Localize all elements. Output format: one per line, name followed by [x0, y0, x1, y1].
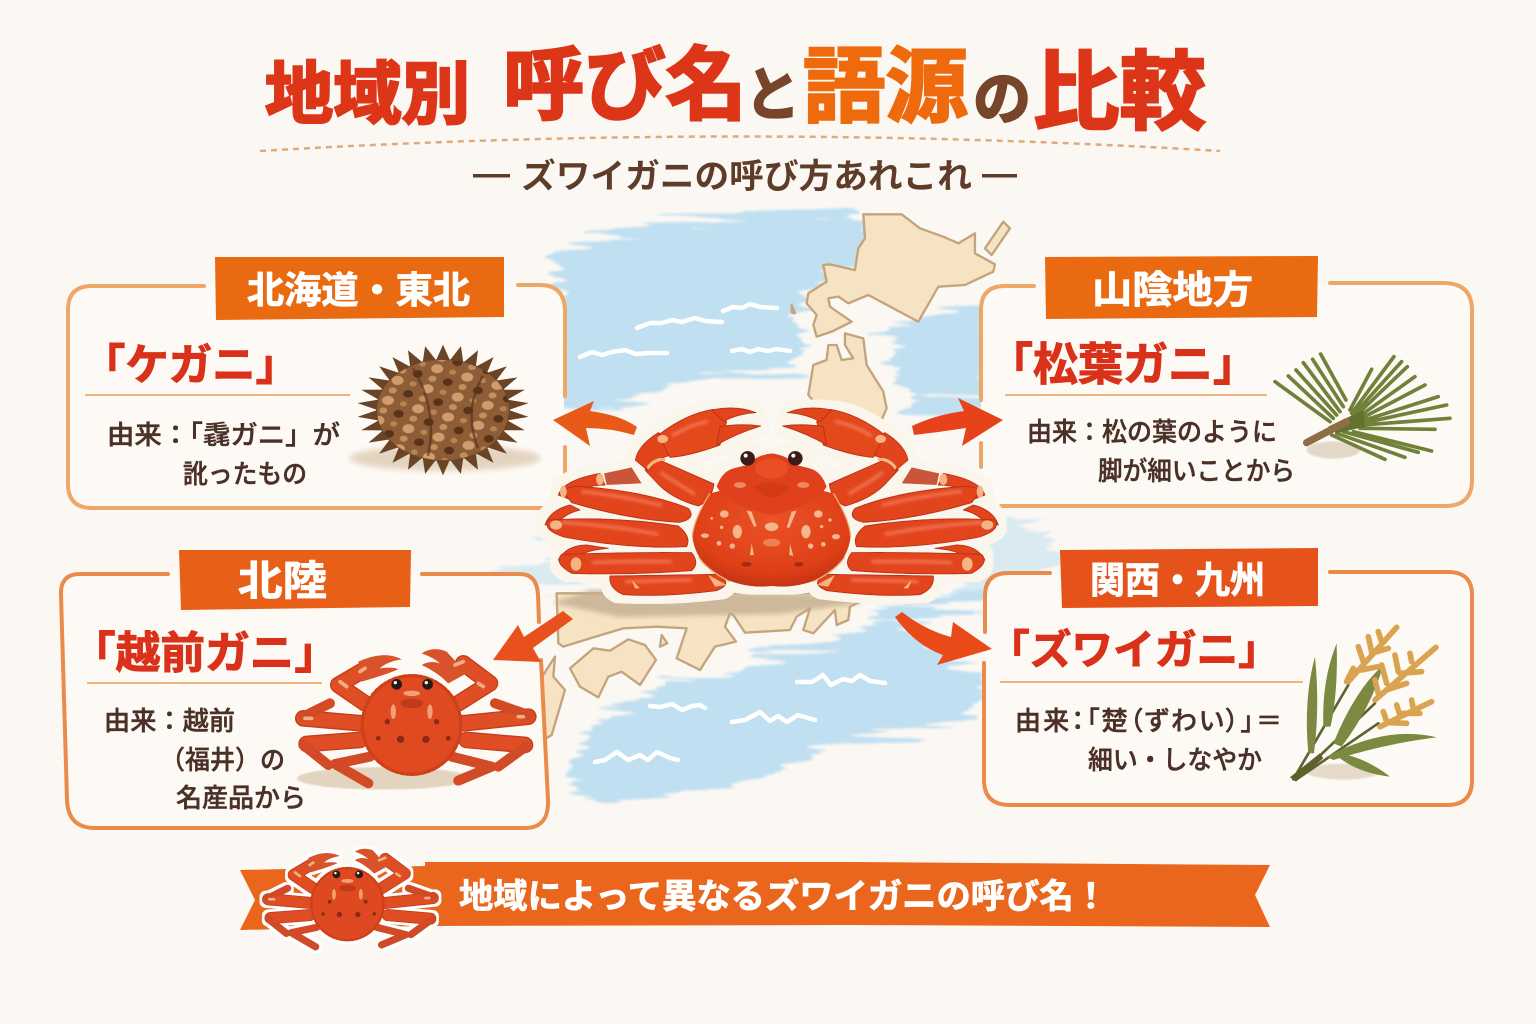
icon: pine needles — [1275, 354, 1450, 459]
banner text: 地域によって異なるズワイガニの呼び名！ — [459, 877, 1108, 916]
origin text — [1015, 706, 1282, 775]
title: 呼び名 — [503, 41, 747, 130]
title — [265, 41, 1206, 141]
map: Japan land — [540, 214, 1010, 740]
ribbon — [240, 862, 1270, 930]
name: 「越前ガニ」 — [71, 629, 339, 678]
origin text — [1027, 417, 1295, 486]
panel: 北海道・東北 — [67, 257, 565, 508]
arrow: to 関西・九州 — [895, 612, 992, 665]
name: 「ズワイガニ」 — [988, 627, 1280, 673]
map: crab shadow — [552, 590, 862, 617]
region header: 山陰地方 — [1092, 270, 1253, 312]
Hokkaido and northern Honshu — [792, 214, 1010, 432]
title: 比較 — [1033, 45, 1206, 141]
arrow: to 北陸 — [493, 611, 573, 662]
icon: rice plant — [1290, 627, 1437, 782]
origin text: 由来：松の葉のように — [1027, 417, 1277, 447]
name: 「松葉ガニ」 — [988, 339, 1258, 390]
panel: 山陰地方 — [981, 256, 1472, 506]
origin text: 由来：越前 — [104, 706, 235, 736]
crab: eyes — [740, 451, 803, 466]
title: 語源 — [803, 42, 968, 133]
region header — [1045, 256, 1318, 319]
arrow: to 山陰地方 — [912, 398, 1003, 446]
origin text — [104, 706, 306, 813]
icon: hairy crab shell — [349, 345, 541, 475]
arrow: to 北海道・東北 — [553, 401, 637, 446]
title: 地域別 — [265, 57, 470, 133]
icon: small crab — [268, 849, 433, 947]
subtitle: ズワイガニの呼び方あれこれ — [521, 157, 972, 196]
region header: 北海道・東北 — [247, 270, 470, 311]
origin text: 由来：「楚（ずわい）」＝ — [1015, 706, 1282, 736]
region header — [1060, 548, 1318, 608]
name: 「ケガニ」 — [82, 342, 299, 390]
title: と — [745, 63, 800, 128]
origin text — [107, 420, 340, 489]
region header: 北陸 — [238, 558, 327, 604]
icon: crab — [297, 649, 528, 790]
origin text: （福井）の — [160, 745, 285, 775]
crab: right legs — [783, 408, 998, 595]
region header — [179, 550, 411, 610]
origin text: 名産品から — [176, 783, 306, 813]
map: ocean — [490, 212, 1058, 795]
crab: carapace — [692, 453, 851, 587]
origin text: 細い・しなやか — [1088, 745, 1262, 775]
bottom banner — [240, 849, 1270, 947]
panel: 関西・九州 — [984, 548, 1472, 805]
region header: 関西・九州 — [1090, 560, 1265, 601]
origin text: 訛ったもの — [183, 459, 307, 489]
western Honshu, Shikoku, Kyushu — [540, 593, 860, 740]
crab: left legs — [545, 408, 761, 595]
origin text: 脚が細いことから — [1098, 456, 1295, 486]
title: の — [973, 67, 1031, 132]
central crab — [545, 408, 998, 595]
panel: 北陸 — [60, 550, 548, 828]
origin text: 由来：「毳ガニ」が — [107, 420, 340, 450]
region header — [215, 257, 504, 320]
map: waves — [580, 304, 885, 762]
